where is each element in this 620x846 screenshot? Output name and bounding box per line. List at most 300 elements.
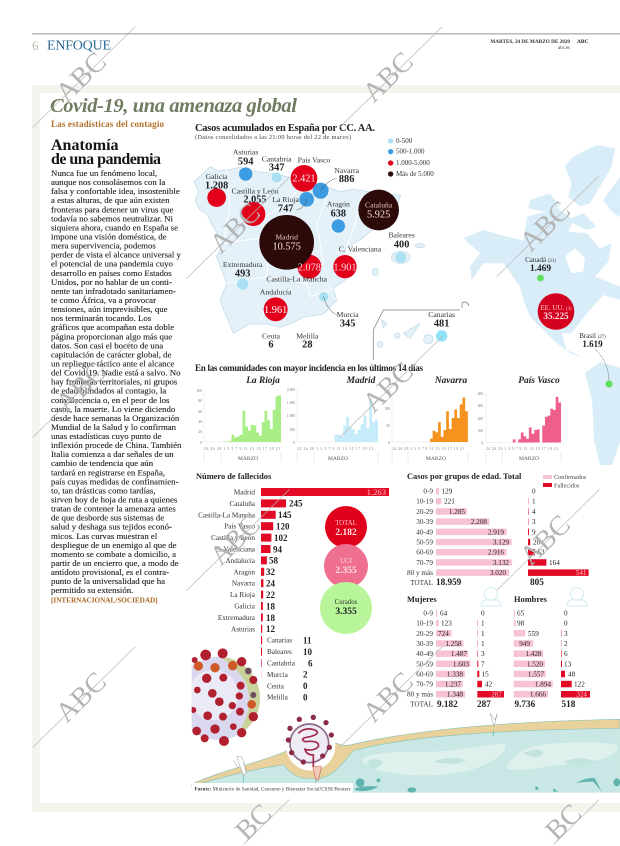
summary circles: Curados [335,599,358,606]
article body text: de edad blindados al contagio, la [51,386,166,396]
section tag: Las estadísticas del contagio [51,119,164,129]
rows: 949 [519,640,530,648]
article body text: desarrollo en países como Estados [51,268,172,278]
rows [514,610,587,709]
chart: mujeres [407,595,504,709]
article heading: Anatomía [51,137,119,154]
region labels: 2.421 [292,174,316,185]
labels: 0 [303,681,308,691]
rows: 2.208 [471,518,487,526]
watermarks: ABC [514,509,577,572]
region labels: Castilla-La Mancha [266,274,328,283]
leader lines [296,178,337,315]
article body text: sirven hoy de hoja de ruta a quienes [51,495,178,505]
region labels: 10.575 [272,241,301,252]
region labels: Canarias [428,310,455,319]
confirmed bars [436,488,512,576]
labels: Melilla [267,694,289,702]
labels: 1.263 [367,487,386,497]
chart: numero de fallecidos: Número de fallecidos [196,472,272,481]
rows: 1 [481,630,485,638]
map legend: 0-500 [396,137,413,145]
article body text: permitido su extensión. [51,585,133,595]
legend [543,474,587,490]
region labels: C. Valenciana [339,245,382,254]
region labels: Aragón [327,199,350,208]
map legend: 1.000-5.000 [396,159,430,167]
chart: numero de fallecidos [196,472,389,702]
rows: 40-49 [416,650,433,658]
rows: 50-59 [416,660,433,668]
article body text: tensiones, aún imprevisibles, que [51,304,168,314]
legend: Fallecidos [554,482,580,490]
labels: 145 [278,510,292,520]
labels: 0 [303,692,308,702]
watermarks: ABC [50,46,113,109]
inset: Canarias [373,310,460,360]
region labels: 1.901 [333,262,357,273]
labels: 2 [303,670,308,680]
region labels: 28 [302,340,312,351]
chart: La Rioja: MARZO [238,456,258,462]
region labels: 6 [268,340,274,351]
article body text: Mundial de la Salud y lo confirman [51,422,177,432]
article body text: aunque nos consolásemos con la [51,177,165,187]
watermarks: BC [540,798,588,846]
chart: Pais Vasco: 300 [478,404,483,408]
summary circles [320,506,372,634]
region labels: Murcia [337,310,359,319]
rows: 3.132 [493,559,509,567]
labels: 58 [269,556,278,566]
rows: 1.520 [527,660,543,668]
chart: casos por grupos de edad: Casos por grupos de edad. Total [407,472,522,481]
rows: 1.348 [447,691,463,699]
rows: TOTAL [410,579,433,587]
nucleus [362,743,506,775]
world map labels and markers: Brasil (27) [579,332,606,340]
labels: 18 [266,602,276,612]
article body text: tardará en registrarse en España, [51,467,165,477]
heading: casos acumulados: Casos acumulados en España por CC. AA. [195,123,375,134]
faint person icons [481,588,587,606]
page header: ABC [577,39,588,45]
rows: 221 [444,498,455,506]
rows: TOTAL [410,700,433,708]
chart: mujeres: Mujeres [407,595,437,604]
chart: Navarra: 50 [386,424,390,428]
watermarks: BC [230,798,278,846]
article body text: te como África, va a provocar [51,295,156,305]
deaths bars [561,630,590,698]
watermarks: ABC [50,356,113,419]
rows: 30-39 [416,640,433,648]
watermarks: ABC [50,666,113,729]
chart: Madrid: Madrid [346,376,376,386]
article body text: perder de vista el alcance universal y [51,250,182,260]
article body text: impone una visión doméstica, de [51,231,167,241]
article body text: [INTERNACIONAL/SOCIEDAD] [51,596,158,604]
rows: 1.338 [447,670,463,678]
rows: 1 [532,498,536,506]
article body text: todavía no sabemos neutralizar. Ni [51,213,173,223]
rows: 2 [564,640,568,648]
rows: 15 [482,670,489,678]
region labels: 400 [394,240,409,251]
rows: 20-29 [416,508,433,516]
rows: 50-59 [416,538,433,546]
labels: Ceuta [267,682,285,690]
labels: 24 [266,578,276,588]
rows: 60-69 [416,670,433,678]
summary circles: UCI [340,558,353,565]
article body text: Italia comienza a dar señales de un [51,449,174,459]
region labels: 1.208 [205,181,228,192]
confirmed bars [436,610,471,698]
world map: North and South America [463,145,620,465]
chart: casos por grupos de edad [407,472,589,587]
rows: 1.428 [525,650,542,658]
chart: Madrid: 24 26 28 1 3 5 7 9 11 13 15 17 19 21 [297,447,373,451]
region labels: 345 [340,319,355,330]
watermarks: ABC [357,46,420,109]
labels: 12 [266,624,276,634]
chart: Navarra: Navarra [434,376,467,386]
rows: 129 [442,488,453,496]
page header: ENFOQUE [47,38,111,54]
rows: 0 [564,610,568,618]
labels: 120 [276,522,290,532]
labels: Asturias [231,625,255,633]
region labels: Andalucía [260,287,292,296]
rows: 3.129 [493,538,509,546]
rows: 9.736 [514,699,536,709]
chart: Madrid: MARZO [328,456,348,462]
chart: Pais Vasco: 100 [478,429,483,433]
rows: 65 [517,610,525,618]
labels: La Rioja [230,591,256,599]
article body text: capitulación de carácter global, de [51,349,171,359]
chart: Pais Vasco: País Vasco [518,376,560,386]
rows: 4 [532,508,536,516]
article heading: de una pandemia [51,151,161,168]
watermarks: ABC [204,509,267,572]
region labels: Asturias [233,148,258,157]
chart: Navarra: 24 26 28 1 3 5 7 9 11 13 15 17 19 21 [392,447,464,451]
article body text: un repliegue táctico ante el alcance [51,358,174,368]
cell interior [192,728,620,793]
labels: País Vasco [224,523,255,531]
summary circles: 2.182 [335,528,357,538]
rows: 122 [574,681,585,689]
bubbles [207,165,447,342]
rows: 42 [485,681,493,689]
rows: 0 [481,610,485,618]
region labels: Cantabria [262,154,292,163]
article body text: país cuyas medidas de confinamien- [51,476,179,486]
rows: 805 [530,577,544,587]
deaths bars [528,498,589,576]
region labels: Ceuta [262,331,281,340]
summary circles: TOTAL [335,520,357,527]
article body text: partir de un encierro que, a modo de [51,558,179,568]
confirmed bars [514,610,553,698]
watermarks: ABC [357,356,420,419]
rows: 80 y más [407,691,433,699]
region labels: Navarra [334,166,360,175]
labels: 6 [308,658,313,668]
chart: Pais Vasco: MARZO [519,456,539,462]
chart: Madrid: 2.000 [287,388,295,392]
map legend: Más de 5.000 [396,170,434,178]
region labels: 594 [238,156,253,167]
labels: 22 [266,590,276,600]
article body text: hay fronteras territoriales, ni grupos [51,377,178,387]
world map labels and markers: EE. UU. (3) [540,304,572,312]
rows: 13 [564,660,572,668]
labels: 32 [266,567,276,577]
labels [198,487,386,702]
article body text: convalecencia o, en el peor de los [51,395,170,405]
page header [32,33,620,54]
rows: 0-9 [423,610,433,618]
labels: 18 [266,613,276,623]
chart: Pais Vasco: 0 [481,442,483,446]
world map labels and markers [462,256,613,388]
rows: 1.487 [451,650,467,658]
receptors [233,713,497,775]
vesicle [286,721,335,771]
deaths bars [477,620,504,698]
rows: 10-19 [416,620,433,628]
article body text: página proporcionan algo más que [51,331,172,341]
region labels [205,148,455,351]
labels: Castilla y León [211,534,255,542]
article body text: micos. Las curvas muestran el [51,531,158,541]
map legend [388,137,434,178]
rows: 64 [440,610,448,618]
map: Spain with bubbles by region [194,137,460,360]
rows: 559 [528,630,539,638]
title: Covid-19, una amenaza global [50,95,297,117]
article body text: momento se combate a domicilio, a [51,549,176,559]
rows: 3 [564,630,568,638]
rows: 3 [481,650,485,658]
article body text: inflexión procede de China. También [51,440,182,450]
region labels: La Rioja [272,195,300,204]
article body text: desde hace semanas la Organización [51,413,180,423]
rows: 18.959 [436,577,462,587]
world map labels and markers: 1.619 [582,339,603,349]
article body text: to, tan drásticas como tardías, [51,485,156,495]
rows: 3.020 [490,569,506,577]
rows: 1.237 [445,681,461,689]
article body text: despliegue de un enemigo al que de [51,540,177,550]
labels: 102 [274,533,288,543]
labels: Aragón [233,568,255,576]
chart: hombres: Hombres [514,595,548,604]
rows: 6 [564,650,568,658]
rows: 287 [491,691,502,699]
region labels: Cataluña [365,200,393,209]
rows: 60-69 [416,549,433,557]
illustration: coronavirus [192,648,260,746]
membrane [192,719,620,786]
rows: 1.258 [445,640,462,648]
region labels: 5.925 [367,209,390,220]
region labels: Castilla y León [232,186,279,195]
land: Spain [194,167,425,333]
article body text: salud y deshaga sus tejidos econó- [51,522,172,532]
chart: La Rioja: 60 [198,410,202,414]
region labels: 1.961 [264,305,287,316]
rows: 2.916 [488,549,504,557]
region labels: Extremadura [223,260,263,269]
region labels: 493 [235,268,250,279]
region labels: Madrid [275,232,298,241]
world map labels and markers: 1.469 [530,264,551,274]
rows: 70-79 [416,681,433,689]
rows: 287 [477,699,491,709]
watermarks: ABC [357,666,420,729]
heading: casos acumulados: (Datos consolidados a las 21:00 horas del 22 de marzo) [195,134,351,141]
rows: 80 y más [407,569,433,577]
region labels: Melilla [296,331,319,340]
labels: C. Valenciana [215,546,256,554]
labels: Cantabria [267,660,296,668]
virus particle [290,724,329,763]
page header: MARTES, 24 DE MARZO DE 2020 [490,39,570,45]
article body text: Nunca fue un fenómeno local, [51,168,157,178]
chart: La Rioja: 80 [198,399,202,403]
chart: Madrid: 1.000 [287,414,295,418]
heading: casos acumulados [195,123,375,141]
rows: 1 [481,620,485,628]
labels: Extremadura [218,614,256,622]
chart: La Rioja: 20 [198,430,202,434]
article body text: de que desborde sus sistemas de [51,513,164,523]
watermarks: ABC [204,197,267,260]
region labels: 886 [339,174,354,185]
article body text: nente tan infradotado sanitariamen- [51,286,176,296]
chart: Madrid: 500 [290,428,295,432]
chart: La Rioja: 24 26 28 1 3 5 7 9 11 13 15 17 19 21 [204,447,280,451]
rows: 123 [441,620,452,628]
chart: Navarra: 100 [385,407,390,411]
chart: Navarra: 150 [385,390,390,394]
source note: Fuente: Ministerio de Sanidad, Consumo y Bienestar Social/CSSE/Reuters [194,788,351,792]
rows: 3 [532,518,536,526]
labels: Castilla-La Mancha [198,511,256,519]
chart: Pais Vasco: 200 [478,417,483,421]
summary circles: 2.355 [335,566,357,576]
article body text: Unidos, por no hablar de un conti- [51,277,172,287]
chart: La Rioja: 100 [197,389,202,393]
rows: 9.182 [437,699,458,709]
labels: 10 [303,647,312,657]
labels: Canarias [267,637,292,645]
chart: Navarra [385,376,468,462]
rows: 724 [438,630,449,638]
article body text: nos terminarán tocando. Los [51,313,152,323]
rows: 0-9 [423,488,433,496]
chart: Madrid [287,376,378,462]
region labels: Baleares [388,231,415,240]
rows: 40-49 [416,528,433,536]
region labels: País Vasco [298,155,331,164]
article body text: falsa y confortable idea, insostenible [51,186,180,196]
rows: 1.666 [530,691,546,699]
region labels: Galicia [206,172,228,181]
article body text: el potencial de una pandemia cuyo [51,259,173,269]
labels: Murcia [267,671,289,679]
world map labels and markers: 35.225 [543,311,569,321]
source note [192,783,353,794]
labels: 245 [289,498,303,508]
rows: 0 [564,620,568,628]
organelles [355,778,620,793]
region labels: 347 [269,163,284,174]
rows: 1 [481,640,485,648]
article body text: casos, la muerte. Lo viene diciendo [51,404,176,414]
article heading [51,137,161,168]
chart: Navarra: MARZO [426,456,446,462]
article body text: unas estadísticas cuyo punto de [51,431,162,441]
chart: Madrid: 1.500 [287,401,295,405]
bars [261,488,389,678]
article body text: del Covid-19. Nadie está a salvo. No [51,368,181,378]
chart: La Rioja: La Rioja [245,376,280,386]
region labels: 2.078 [298,262,321,273]
rows: 70-79 [416,559,433,567]
region labels: 481 [434,319,449,330]
article body text: mera supervivencia, podemos [51,241,156,251]
chart: La Rioja: 40 [198,420,202,424]
region labels: 2.055 [243,195,267,206]
chart: hombres [514,595,590,709]
rows: 164 [549,559,560,567]
rows: 10-19 [416,498,433,506]
rows: 48 [568,670,576,678]
rows: 1.557 [528,670,544,678]
world map labels and markers: Canadá (21) [525,256,556,264]
rows: 30-39 [416,518,433,526]
rows: 1.285 [449,508,465,516]
region labels: 747 [278,204,293,215]
rows [407,610,502,709]
rows: 1.894 [535,681,551,689]
chart: La Rioja: 0 [200,441,202,445]
labels: Navarra [232,580,256,588]
article body text: gráficos que acompañan esta doble [51,322,174,332]
rows: 518 [562,699,576,709]
labels: Baleares [267,648,292,656]
chart: Pais Vasco: 24 26 28 1 3 5 7 9 11 13 15 17 19 21 [486,447,558,451]
rows: 2.919 [488,528,504,536]
chart: Pais Vasco [478,376,561,462]
rows: 98 [517,620,525,628]
rows [407,488,587,587]
labels: Andalucía [225,557,256,565]
article body text: fronteras para detener un virus que [51,204,173,214]
rows: 20 [533,538,541,546]
chart: Pais Vasco: 400 [478,392,483,396]
legend: Confirmados [554,474,587,481]
map legend: 500-1.000 [396,148,425,156]
watermarks: ABC [514,195,577,258]
article body text: tratan de contener la amenaza antes [51,504,176,514]
region labels: 638 [331,208,346,219]
